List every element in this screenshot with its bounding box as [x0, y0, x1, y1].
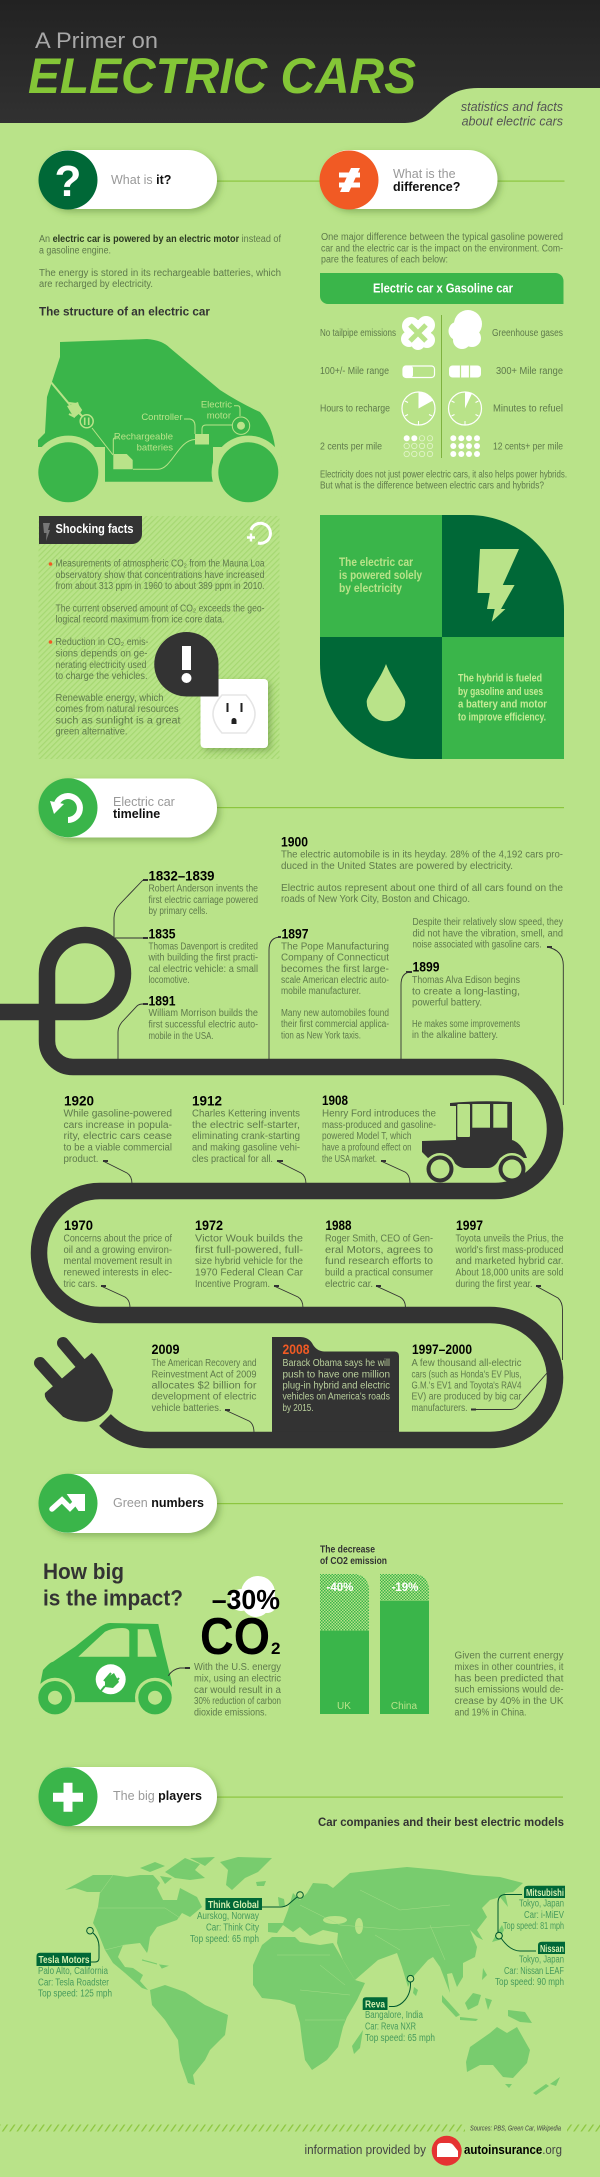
icon: model T car: [422, 1101, 528, 1185]
text: what is an electric car: a gasoline engine.: [39, 246, 111, 256]
map label: Mitsubishi: Car: i-MiEV: [524, 1910, 564, 1921]
diagram labels: batteries: [137, 442, 173, 454]
text: emissions prediction: [454, 1651, 564, 1718]
fact text: comes from natural resources: [56, 704, 178, 715]
text: emissions prediction: Given the current energy: [454, 1651, 564, 1662]
hybrid text: The hybrid is fueled: [458, 673, 542, 685]
text: emissions prediction: such emissions would de-: [454, 1684, 564, 1696]
figure: minus 30 percent CO2: CO: [200, 1608, 270, 1666]
Seas: [323, 1916, 347, 1924]
timeline event 2008: plug-in hybrid and electric: [282, 1380, 390, 1392]
timeline event 1900: The electric automobile is in its heyday. 28% of the 4,192 cars pro-: [281, 850, 563, 861]
timeline event 1997-2000: G.M.'s EV1 and Toyota's RAV4: [412, 1380, 522, 1392]
bar: UK: UK: [337, 1701, 351, 1712]
map label: Mitsubishi: Tokyo, Japan: [519, 1899, 564, 1910]
text: hybrids intro: [320, 469, 567, 491]
heading: structure: The structure of an electric car: [39, 305, 210, 319]
diagram labels: motor: [207, 410, 231, 422]
chart title: The decrease: [320, 1544, 375, 1556]
text: impact note: dioxide emissions.: [194, 1708, 267, 1718]
timeline event 1908: 1908: [322, 1092, 348, 1108]
map label: Mitsubishi: [496, 1886, 565, 1939]
timeline event 1997-2000: EV) are produced by big car: [412, 1392, 522, 1402]
text: emissions prediction: mixes in other countries, it: [454, 1662, 564, 1673]
fact text: sions depends on ge-: [56, 648, 148, 660]
Madagascar: [352, 2030, 363, 2054]
timeline event 1899: in the alkaline battery.: [412, 1030, 498, 1041]
figure: minus 30 percent CO2: –30%: [212, 1584, 280, 1615]
timeline event 1908: [322, 1092, 436, 1184]
North America: [65, 1875, 202, 1990]
section heading: timeline: timeline: [113, 807, 160, 821]
section heading: green numbers: [38, 1474, 563, 1533]
timeline event 1899: to create a long-lasting,: [412, 986, 520, 998]
chart title: [320, 1544, 387, 1567]
icon: warning bubble: [154, 632, 218, 696]
fact text: nerating electricity used: [56, 660, 146, 671]
timeline event 1970: tric cars.: [64, 1279, 98, 1290]
heading: car companies: Car companies and their best electric models: [318, 1815, 564, 1829]
bar: UK: [320, 1574, 369, 1714]
timeline event 1920: 1920: [64, 1093, 94, 1109]
map label: Nissan: Tokyo, Japan: [519, 1955, 564, 1966]
timeline event 1835: with building the first practi-: [148, 952, 258, 964]
timeline event 1920: to be a viable commercial: [64, 1142, 172, 1154]
timeline event 1899: powerful battery.: [412, 998, 482, 1008]
panel: shocking facts: [38, 516, 280, 759]
text: major difference: One major difference between the typical gasoline powered: [321, 232, 563, 243]
text: impact note: With the U.S. energy: [194, 1662, 281, 1673]
diagram labels: Electric: [201, 399, 232, 410]
text: what is an electric car: The energy is stored in its rechargeable batteries, which: [39, 268, 281, 279]
icon: plug at road end: [40, 1343, 113, 1422]
timeline event 1972: size hybrid vehicle for the: [195, 1256, 303, 1267]
timeline event 1988: build a practical consumer: [325, 1268, 434, 1278]
map label: Think Global: [190, 1892, 303, 1945]
section heading: what is the difference: difference?: [393, 180, 460, 194]
timeline event 1832-1839: by primary cells.: [148, 906, 208, 917]
timeline event 1835: Thomas Davenport is credited: [148, 941, 258, 952]
heading: how big is the impact: [43, 1559, 183, 1611]
timeline event 1920: cars increase in popula-: [64, 1120, 172, 1131]
timeline event 2009: [152, 1341, 257, 1433]
text: what is an electric car: [39, 234, 281, 290]
row: recharge: Minutes to refuel: [493, 404, 563, 414]
timeline event 1897: becomes the first large-: [281, 964, 389, 975]
main title: ELECTRIC CARS: [28, 48, 416, 104]
timeline event 1970: oil and a growing environ-: [64, 1245, 172, 1256]
timeline event 1900: Electric autos represent about one third of all cars found on the: [281, 883, 563, 894]
timeline event 1912: and making gasoline vehi-: [192, 1142, 300, 1154]
map label: Nissan: Nissan: [540, 1944, 564, 1955]
section heading: big players: [38, 1767, 563, 1826]
timeline event 1997-2000: 1997–2000: [412, 1341, 472, 1357]
fact text: from about 313 ppm in 1960 to about 389 ppm in 2010.: [56, 581, 264, 592]
timeline event 1908: Henry Ford introduces the: [322, 1109, 436, 1120]
bar chart: CO2 decrease: [320, 1544, 429, 1714]
timeline event 1899: Thomas Alva Edison begins: [412, 975, 520, 986]
timeline event 1970: Concerns about the price of: [64, 1234, 172, 1245]
Islands: [256, 1881, 532, 2023]
timeline event 1908: mass-produced and gasoline-: [322, 1120, 436, 1131]
logo: autoinsurance: [432, 2136, 562, 2166]
logo: autoinsurance: autoinsurance.org: [464, 2142, 562, 2157]
chart title: of CO2 emission: [320, 1555, 387, 1567]
timeline event 1899: 1899: [412, 959, 440, 975]
bar: UK: -40%: [327, 1582, 353, 1594]
2008 highlight box: [272, 1337, 399, 1440]
timeline event 1835: 1835: [148, 926, 176, 942]
timeline event 1997-2000: A few thousand all-electric: [412, 1358, 522, 1369]
timeline event 1920: rity, electric cars cease: [64, 1131, 172, 1142]
timeline road: [0, 935, 555, 1440]
row: emissions: No tailpipe emissions: [320, 328, 396, 339]
timeline event 1897: scale American electric auto-: [281, 975, 389, 986]
timeline event 1897: Company of Connecticut: [281, 953, 389, 964]
text: emissions prediction: crease by 40% in the UK: [454, 1696, 564, 1707]
timeline event 1897: mobile manufacturer.: [281, 986, 361, 997]
comparison header bar: Electric car x Gasoline car: [373, 282, 513, 296]
fact text: [49, 559, 265, 738]
fact text: green alternative.: [56, 726, 128, 738]
timeline event 2008: push to have one million: [282, 1370, 390, 1380]
timeline event 1900: 1900: [281, 834, 308, 850]
icon: green car with plug: [30, 1623, 180, 1718]
fact text: logical record maximum from ice core data.: [56, 615, 224, 626]
figure: minus 30 percent CO2: 2: [271, 1639, 280, 1658]
timeline event 1908: powered Model T, which: [322, 1131, 412, 1142]
electric car text: The electric car: [339, 557, 413, 569]
map label: Nissan: [495, 1932, 565, 1988]
timeline event 1972: 1970 Federal Clean Car: [195, 1268, 304, 1278]
timeline event 1970: mental movement result in: [64, 1256, 172, 1267]
fact text: The current observed amount of CO₂ exceeds the geo-: [56, 604, 264, 615]
row: cost: [320, 435, 563, 457]
row: cost: 2 cents per mile: [320, 442, 382, 452]
icon: wall outlet: [200, 679, 268, 748]
timeline event 1920: product.: [64, 1154, 98, 1165]
timeline event 1891: 1891: [148, 992, 176, 1008]
subtitle: statistics and facts: [461, 100, 563, 114]
timeline event 1997-2000: manufacturers.: [412, 1403, 468, 1414]
timeline event 2008: 2008: [282, 1341, 310, 1357]
section heading: what is it: [38, 150, 320, 210]
timeline event 2009: Reinvestment Act of 2009: [152, 1370, 257, 1380]
diagram: electric car structure: [32, 339, 285, 509]
timeline event 1900: duced in the United States are powered by electricity.: [281, 861, 513, 872]
row: emissions: Greenhouse gases: [492, 328, 563, 339]
text: impact note: car would result in a: [194, 1685, 281, 1696]
fact text: Renewable energy, which: [56, 693, 164, 704]
map label: Tesla Motors: Car: Tesla Roadster: [38, 1978, 110, 1988]
map label: Nissan: Car: Nissan LEAF: [504, 1966, 564, 1977]
row: range: 300+ Mile range: [496, 366, 563, 377]
timeline event 1970: renewed interests in elec-: [64, 1268, 172, 1278]
map label: Think Global: Think Global: [208, 1900, 259, 1911]
timeline event 1997-2000: [412, 1341, 547, 1414]
plug and cord: [50, 381, 113, 455]
timeline event 1972: first full-powered, full-: [195, 1245, 303, 1256]
timeline event 1891: William Morrison builds the: [148, 1008, 258, 1019]
timeline event 1891: mobile in the USA.: [148, 1031, 214, 1042]
row: range: [320, 366, 563, 378]
tab: shocking facts: [39, 516, 142, 544]
timeline event 1900: [281, 834, 563, 1105]
timeline event 2008: vehicles on America's roads: [282, 1392, 390, 1402]
timeline event 1912: eliminating crank-starting: [192, 1131, 300, 1142]
row: recharge: Hours to recharge: [320, 404, 390, 414]
battery, controller, motor: [113, 406, 250, 469]
timeline event 1835: cal electric vehicle: a small: [148, 964, 258, 975]
timeline event 1891: [118, 992, 258, 1060]
diagram labels: [114, 399, 232, 454]
text: emissions prediction: has been predicted that: [454, 1674, 564, 1684]
timeline event 1900: noise associated with gasoline cars.: [412, 940, 542, 950]
subtitle: about electric cars: [462, 114, 563, 128]
text: major difference: [321, 232, 563, 266]
map label: Think Global: Aurskog, Norway: [197, 1911, 259, 1922]
timeline event 2008: by 2015.: [282, 1403, 314, 1414]
bar: China: China: [391, 1701, 417, 1712]
timeline event 1997: Toyota unveils the Prius, the: [456, 1234, 564, 1245]
timeline event 1899: [401, 959, 520, 1060]
timeline event 1997: About 18,000 units are sold: [456, 1268, 564, 1278]
fact text: Measurements of atmospheric CO₂ from the Mauna Loa: [56, 559, 265, 570]
timeline event 1835: locomotive.: [148, 975, 190, 986]
tab: shocking facts: Shocking facts: [56, 522, 134, 536]
timeline event 1988: Roger Smith, CEO of Gen-: [325, 1234, 433, 1245]
Greenland: [220, 1857, 272, 1890]
timeline event 2009: The American Recovery and: [152, 1358, 256, 1369]
icon: refresh: [247, 523, 270, 543]
panel: electric vs hybrid quadrant: [320, 515, 564, 759]
section heading: green numbers: Green numbers: [113, 1496, 204, 1510]
heading: how big is the impact: is the impact?: [43, 1586, 183, 1611]
map label: Tesla Motors: [36, 1927, 112, 2000]
timeline event 1897: their first commercial applica-: [281, 1019, 389, 1030]
diagram labels: Rechargeable: [114, 431, 173, 442]
wheels: [38, 442, 278, 502]
timeline event 1899: He makes some improvements: [412, 1019, 520, 1030]
timeline event 1970: [64, 1217, 172, 1308]
title small line: A Primer on: [35, 28, 158, 53]
hybrid text: a battery and motor: [458, 699, 548, 711]
timeline event 1832-1839: [114, 868, 258, 938]
map label: Reva: Reva: [365, 2000, 385, 2010]
Arctic islands: [140, 1857, 215, 1884]
timeline event 1988: electric car.: [325, 1279, 373, 1290]
diagram labels: Controller: [141, 412, 182, 423]
timeline event 1920: While gasoline-powered: [64, 1109, 172, 1120]
timeline event 1891: first successful electric auto-: [148, 1020, 258, 1030]
section heading: what is the difference: What is the: [393, 167, 456, 181]
text: major difference: car and the electric car is the impact on the environment. Com-: [321, 244, 563, 254]
row: recharge: [320, 392, 563, 425]
timeline event 1972: Incentive Program.: [195, 1279, 270, 1290]
footer sources strip: Sources: PBS, Green Car, Wikipedia: [470, 2124, 561, 2132]
hybrid text: to improve efficiency.: [458, 712, 546, 724]
bar: China: -19%: [392, 1582, 418, 1594]
timeline event 1900: Despite their relatively slow speed, they: [412, 917, 563, 928]
Caribbean: [142, 1960, 167, 1968]
Australia: [466, 2027, 530, 2078]
South America: [150, 1985, 228, 2085]
map label: Tesla Motors: Tesla Motors: [38, 1955, 90, 1966]
timeline event 1997: [455, 1217, 564, 1360]
timeline event 2009: allocates $2 billion for: [152, 1380, 257, 1392]
timeline event 1988: [325, 1217, 434, 1308]
icon: lightning bolt: [478, 549, 519, 622]
electric car text: [339, 557, 423, 595]
text: what is an electric car: are recharged by electricity.: [39, 279, 153, 290]
heading: how big is the impact: How big: [43, 1559, 124, 1584]
row: emissions: [320, 310, 563, 350]
section heading: what is the difference: [320, 150, 564, 210]
timeline event 1972: [195, 1217, 304, 1308]
fact text: observatory show that concentrations have increased: [56, 570, 264, 581]
icon: cloud behind figure: [230, 1576, 277, 1617]
map label: Reva: Top speed: 65 mph: [365, 2033, 435, 2044]
timeline event 1897: Many new automobiles found: [281, 1008, 389, 1019]
fact text: to charge the vehicles.: [56, 671, 148, 682]
timeline event 1972: 1972: [195, 1217, 223, 1233]
timeline event 2009: development of electric: [152, 1392, 256, 1402]
bar: China: [380, 1574, 429, 1714]
timeline event 1997: 1997: [456, 1217, 483, 1233]
timeline event 1997: during the first year.: [456, 1279, 532, 1290]
timeline event 1997-2000: cars (such as Honda's EV Plus,: [412, 1370, 522, 1380]
text: hybrids intro: But what is the difference between electric cars and hybrids?: [320, 480, 544, 491]
Eurasia: [268, 1867, 523, 1993]
Borders: [97, 1875, 470, 2020]
map label: Tesla Motors: Top speed: 125 mph: [38, 1988, 112, 2000]
timeline event 1835: [114, 926, 258, 986]
comparison header bar: [320, 273, 564, 304]
text: what is an electric car: An electric car is powered by an electric motor instead of: [39, 234, 281, 245]
map label: Mitsubishi: Top speed: 81 mph: [503, 1921, 564, 1932]
timeline event 1970: 1970: [64, 1217, 93, 1233]
map label: Mitsubishi: Mitsubishi: [526, 1888, 564, 1899]
timeline event 1897: [269, 925, 389, 1060]
map label: Think Global: Top speed: 65 mph: [190, 1934, 259, 1945]
text: emissions prediction: and 19% in China.: [454, 1708, 526, 1718]
timeline event 1988: eral Motors, agrees to: [325, 1245, 433, 1256]
timeline event 1912: 1912: [192, 1093, 222, 1109]
text: impact note: [168, 1662, 281, 1718]
row: cost: 12 cents+ per mile: [493, 442, 563, 452]
electric car text: by electricity: [339, 583, 403, 595]
timeline event 2008: [282, 1341, 390, 1414]
subtitle: [461, 100, 563, 128]
figure: minus 30 percent CO2: [200, 1584, 280, 1666]
timeline event 1997: and marketed hybrid car.: [456, 1256, 564, 1267]
timeline event 2009: vehicle batteries.: [152, 1403, 222, 1414]
fact text: Reduction in CO₂ emis-: [56, 637, 148, 648]
map label: Reva: [363, 1975, 435, 2044]
timeline event 1972: Victor Wouk builds the: [195, 1234, 303, 1245]
timeline event 1897: tion as New York taxis.: [281, 1030, 361, 1042]
timeline event 1897: The Pope Manufacturing: [281, 941, 389, 952]
timeline event 1912: the electric self-starter,: [192, 1120, 300, 1131]
map label: Reva: Car: Reva NXR: [365, 2022, 416, 2032]
timeline event 1832-1839: 1832–1839: [148, 868, 215, 884]
timeline event 1897: 1897: [282, 925, 309, 941]
timeline event 1912: Charles Kettering invents: [192, 1109, 300, 1120]
footer sources strip: [0, 2124, 600, 2132]
section heading: what is it: What is it?: [111, 173, 171, 187]
timeline event 1988: fund research efforts to: [325, 1256, 433, 1267]
timeline event 1912: [192, 1093, 306, 1184]
timeline event 1912: cles practical for all.: [192, 1154, 273, 1165]
timeline event 1900: roads of New York City, Boston and Chicago.: [281, 894, 470, 905]
section heading: timeline: [38, 778, 564, 838]
map label: Nissan: Top speed: 90 mph: [495, 1977, 564, 1988]
section heading: what is it: ?: [55, 157, 81, 206]
icon: fuel drop: [367, 664, 405, 721]
header band: [0, 0, 600, 123]
text: major difference: pare the features of each below:: [321, 254, 448, 266]
timeline event 1908: the USA market.: [322, 1154, 377, 1165]
fact text: such as sunlight is a great: [56, 716, 181, 726]
timeline event 1920: [64, 1093, 172, 1184]
Africa: [253, 1937, 365, 2070]
timeline event 2008: Barack Obama says he will: [282, 1358, 390, 1369]
section heading: big players: The big players: [113, 1789, 202, 1803]
timeline event 1908: have a profound effect on: [322, 1142, 412, 1154]
map label: Think Global: Car: Think City: [206, 1922, 259, 1934]
hybrid text: [458, 673, 548, 724]
timeline event 1997: world's first mass-produced: [455, 1245, 564, 1256]
row: range: 100+/- Mile range: [320, 366, 389, 377]
electric car text: is powered solely: [339, 570, 423, 582]
text: impact note: mix, using an electric: [194, 1674, 281, 1684]
comparison table: [320, 310, 563, 458]
hybrid text: by gasoline and uses: [458, 686, 543, 698]
footer credit text: information provided by: [304, 2142, 426, 2157]
section heading: timeline: Electric car: [113, 795, 175, 809]
world map: [65, 1857, 560, 2095]
text: impact note: 30% reduction of carbon: [194, 1696, 281, 1707]
timeline event 1988: 1988: [326, 1217, 352, 1233]
map label: Tesla Motors: Palo Alto, California: [38, 1966, 108, 1977]
timeline event 1900: did not have the vibration, smell, and: [412, 928, 563, 940]
timeline event 1832-1839: Robert Anderson invents the: [148, 884, 258, 895]
timeline event 1832-1839: first electric carriage powered: [148, 895, 258, 906]
timeline event 2009: 2009: [152, 1341, 180, 1357]
map label: Reva: Bangalore, India: [365, 2010, 423, 2021]
